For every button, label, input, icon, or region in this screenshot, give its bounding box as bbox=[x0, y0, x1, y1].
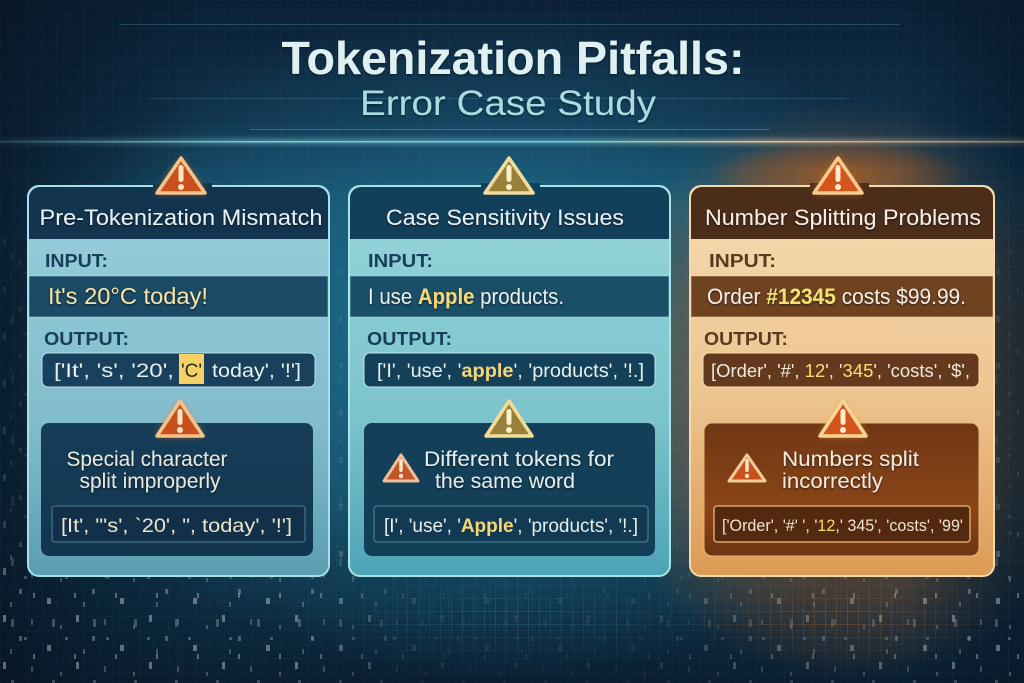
icon: small warning bbox=[384, 455, 418, 481]
warning note: Special character bbox=[66, 448, 228, 471]
title line 1: Tokenization Pitfalls: bbox=[282, 32, 744, 84]
warning note: the same word bbox=[435, 470, 575, 493]
panel body bbox=[690, 186, 994, 576]
corrected token box bbox=[52, 506, 305, 542]
panel header bbox=[350, 187, 669, 239]
warning note: split improperly bbox=[80, 470, 221, 493]
output tokens bbox=[54, 361, 301, 382]
icon: warning, panel 2 box bbox=[486, 401, 532, 436]
corrected token box bbox=[714, 506, 970, 542]
panel heading: Number Splitting Problems bbox=[705, 205, 981, 230]
output bar bbox=[364, 353, 655, 387]
panel: pre-tokenization mismatch bbox=[28, 186, 329, 576]
input label: INPUT: bbox=[45, 251, 108, 271]
corrected tokens: [I', 'use', 'Apple', 'products', '!.] bbox=[384, 515, 638, 537]
output label: OUTPUT: bbox=[44, 329, 129, 349]
output tokens: ['It', 's', '20', bbox=[54, 361, 174, 382]
warning note: incorrectly bbox=[782, 470, 884, 493]
output tokens: today', '!'] bbox=[212, 361, 301, 382]
icon: warning, panel 1 box bbox=[157, 401, 203, 436]
panel body bbox=[28, 186, 329, 576]
warning note bbox=[424, 448, 614, 493]
warning note bbox=[66, 448, 228, 493]
input text: I use Apple products. bbox=[368, 284, 564, 309]
panel heading: Pre-Tokenization Mismatch bbox=[40, 205, 322, 230]
panel header bbox=[691, 187, 993, 239]
corrected tokens: [It', "'s', `20', ", today', '!'] bbox=[61, 515, 292, 537]
icon: warning, panel 3 top bbox=[810, 158, 869, 193]
panel heading: Case Sensitivity Issues bbox=[386, 205, 624, 230]
result box bbox=[41, 423, 313, 556]
panel body bbox=[349, 186, 670, 576]
result box bbox=[364, 423, 655, 556]
warning note: Numbers split bbox=[782, 448, 919, 471]
output bar bbox=[703, 353, 979, 387]
input band bbox=[350, 276, 669, 317]
warning note bbox=[782, 448, 919, 493]
output tokens: ['I', 'use', 'apple', 'products', '!.] bbox=[377, 361, 644, 382]
panel: case sensitivity issues bbox=[349, 186, 670, 576]
result box bbox=[704, 423, 979, 556]
icon: warning, panel 3 box bbox=[820, 401, 866, 436]
input text: Order #12345 costs $99.99. bbox=[707, 284, 966, 309]
panel header bbox=[29, 187, 328, 239]
title bbox=[282, 32, 744, 123]
panel: number splitting problems bbox=[690, 186, 994, 576]
output label: OUTPUT: bbox=[367, 329, 452, 349]
icon: small warning bbox=[729, 455, 765, 481]
icon: warning, panel 2 top bbox=[481, 158, 540, 193]
output tokens: 'C' bbox=[181, 361, 202, 382]
corrected tokens: ['Order', '#' ', '12,' 345', 'costs', '99' bbox=[722, 516, 963, 535]
input band bbox=[29, 276, 328, 317]
input label: INPUT: bbox=[709, 251, 776, 271]
input band bbox=[691, 276, 993, 317]
input label: INPUT: bbox=[368, 251, 433, 271]
warning note: Different tokens for bbox=[424, 448, 614, 471]
icon: warning, panel 1 top bbox=[153, 158, 212, 193]
output label: OUTPUT: bbox=[704, 329, 788, 349]
corrected token box bbox=[374, 506, 648, 542]
title line 2: Error Case Study bbox=[360, 84, 657, 123]
highlighted token bbox=[179, 354, 204, 384]
output bar bbox=[42, 353, 315, 387]
input text: It's 20°C today! bbox=[48, 283, 208, 309]
output tokens: [Order', '#', 12', '345', 'costs', '$', bbox=[711, 361, 970, 381]
